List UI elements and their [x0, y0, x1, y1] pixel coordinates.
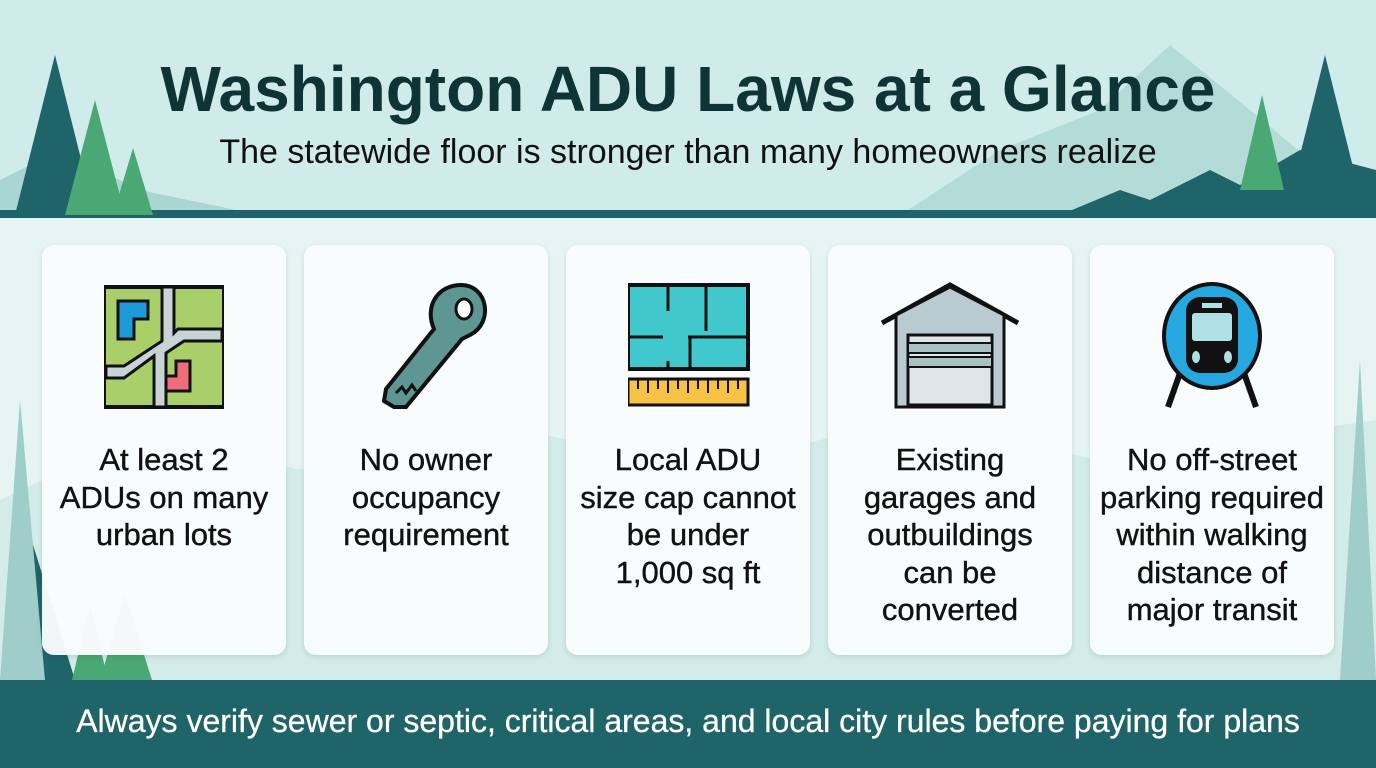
text	[343, 442, 509, 552]
footer note: Always verify sewer or septic, critical areas, and local city rules before paying for plans	[76, 703, 1300, 739]
text: Local ADU	[615, 442, 761, 477]
card: parking	[1090, 245, 1334, 655]
card: owner occupancy	[304, 245, 548, 655]
text: outbuildings	[867, 517, 1033, 552]
text: garages and	[864, 480, 1036, 514]
card: ADUs	[42, 245, 286, 655]
text: size cap cannot	[580, 480, 796, 514]
subtitle: The statewide floor is stronger than many homeowners realize	[219, 133, 1157, 171]
text	[864, 442, 1036, 627]
icon: key	[382, 283, 488, 409]
text: be under	[627, 517, 749, 552]
text: can be	[903, 554, 997, 590]
text: At least 2	[99, 442, 229, 477]
icon: lot map	[104, 285, 224, 409]
title: Washington ADU Laws at a Glance	[161, 53, 1215, 125]
text: urban lots	[96, 517, 232, 552]
text: No off-street	[1127, 442, 1297, 477]
text: parking required	[1100, 480, 1324, 514]
text: No owner	[360, 442, 492, 477]
text: distance of	[1137, 554, 1287, 590]
text	[1100, 442, 1324, 627]
text: major transit	[1127, 592, 1297, 627]
text: within walking	[1116, 517, 1308, 552]
text: converted	[882, 592, 1018, 627]
text	[60, 442, 268, 552]
icon: transit	[1162, 282, 1262, 408]
text: requirement	[343, 517, 509, 552]
text	[580, 442, 796, 590]
text: ADUs on many	[60, 480, 268, 514]
text: 1,000 sq ft	[616, 554, 760, 590]
icon: garage	[880, 282, 1020, 408]
icon: floor plan with ruler	[628, 283, 750, 406]
card: size cap	[566, 245, 810, 655]
text: Existing	[896, 442, 1004, 477]
text: occupancy	[352, 480, 500, 514]
card: garages	[828, 245, 1072, 655]
